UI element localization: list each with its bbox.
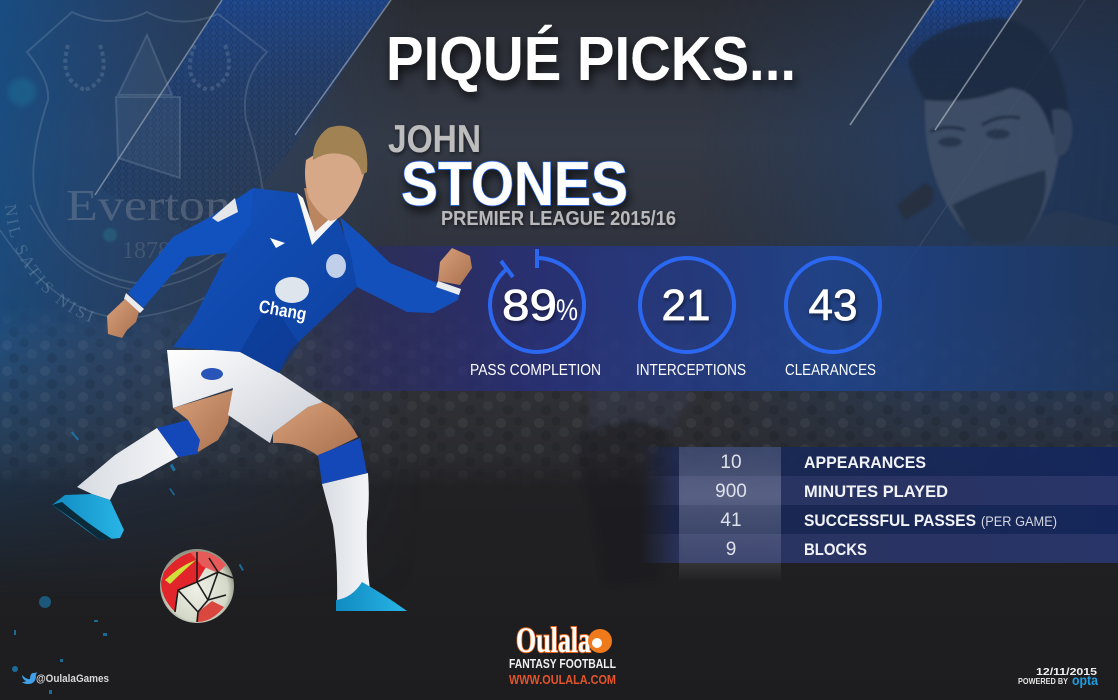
clearances label: CLEARANCES xyxy=(785,362,876,379)
club badge xyxy=(326,254,346,278)
appearances label: APPEARANCES xyxy=(804,453,926,472)
date: 12/11/2015 xyxy=(1036,666,1097,678)
head xyxy=(305,145,365,221)
rear leg xyxy=(273,402,407,611)
crest motto: NIL SATIS NISI xyxy=(4,204,94,322)
player first name: JOHN xyxy=(388,118,481,161)
blocks value: 9 xyxy=(726,539,736,560)
front leg xyxy=(52,390,233,540)
interceptions value: 21 xyxy=(662,281,710,330)
logo wordmark: Oulala xyxy=(516,620,591,660)
far cuff xyxy=(436,281,461,295)
chang logo text: Chang xyxy=(257,296,308,324)
interceptions label: INTERCEPTIONS xyxy=(636,362,746,379)
per game note: (PER GAME) xyxy=(981,514,1057,529)
collar xyxy=(297,193,337,245)
table row 1 xyxy=(640,447,1118,476)
diagonal hex stripe right xyxy=(850,0,1086,246)
clearances value: 43 xyxy=(809,281,857,330)
appearances value: 10 xyxy=(720,452,742,473)
crest year: 1878 xyxy=(122,238,170,264)
date and credit xyxy=(1018,666,1098,688)
faded Pique portrait xyxy=(880,18,1118,390)
stat: interceptions xyxy=(636,258,746,379)
minutes value: 900 xyxy=(715,481,747,502)
faded background player xyxy=(575,250,690,585)
passes value: 41 xyxy=(720,510,742,531)
twitter bird icon xyxy=(22,672,37,684)
stat table xyxy=(640,447,1118,582)
passes label: SUCCESSFUL PASSES xyxy=(804,511,976,530)
near hand xyxy=(107,299,139,338)
interceptions ring xyxy=(640,258,734,352)
neck xyxy=(304,188,345,236)
table row 3 xyxy=(640,505,1118,534)
diagonal hex stripe left xyxy=(95,0,391,240)
minutes label: MINUTES PLAYED xyxy=(804,482,948,501)
Everton crest watermark xyxy=(0,11,268,322)
sleeve badge xyxy=(212,198,238,222)
far arm xyxy=(340,217,460,313)
powered by: POWERED BY xyxy=(1018,676,1068,686)
player figure xyxy=(52,126,472,611)
far hand xyxy=(438,248,472,285)
football xyxy=(160,549,234,623)
title: PIQUÉ PICKS... xyxy=(386,25,796,94)
stripe right edge line xyxy=(935,0,1022,130)
stat: pass completion xyxy=(470,249,601,379)
crest wreath left xyxy=(65,45,104,90)
beard xyxy=(952,170,1046,244)
shorts badge xyxy=(201,368,223,380)
shorts xyxy=(167,350,323,443)
season subtitle: PREMIER LEAGUE 2015/16 xyxy=(441,208,676,230)
value column xyxy=(679,447,781,582)
umbro badge xyxy=(270,238,285,248)
pass completion ring xyxy=(490,249,584,352)
player surname: STONES xyxy=(401,150,628,219)
crest wreath right xyxy=(190,45,229,90)
logo url: WWW.OULALA.COM xyxy=(509,673,616,687)
logo ball xyxy=(588,629,612,653)
blocks label: BLOCKS xyxy=(804,540,867,559)
twitter handle xyxy=(22,672,109,685)
pass completion value: 89 xyxy=(502,281,557,330)
torso xyxy=(173,188,357,373)
twitter text: @OulalaGames xyxy=(36,673,109,685)
stats band xyxy=(280,246,1118,391)
pass completion label: PASS COMPLETION xyxy=(470,362,601,379)
clearances ring xyxy=(786,258,880,352)
Oulala logo xyxy=(509,620,616,687)
table row 2 xyxy=(640,476,1118,505)
opta: opta xyxy=(1072,672,1098,688)
hair xyxy=(313,126,367,175)
percent sign: % xyxy=(556,294,578,327)
crest tower xyxy=(116,35,180,178)
near cuff xyxy=(124,293,144,313)
table row 4 xyxy=(640,534,1118,563)
boot splash particles xyxy=(12,432,244,694)
chang elephants xyxy=(275,277,309,303)
stat: clearances xyxy=(785,258,880,379)
crest name: Everton xyxy=(66,181,231,230)
near arm xyxy=(128,188,253,308)
torso shading xyxy=(240,300,300,373)
logo tagline: FANTASY FOOTBALL xyxy=(509,657,616,671)
